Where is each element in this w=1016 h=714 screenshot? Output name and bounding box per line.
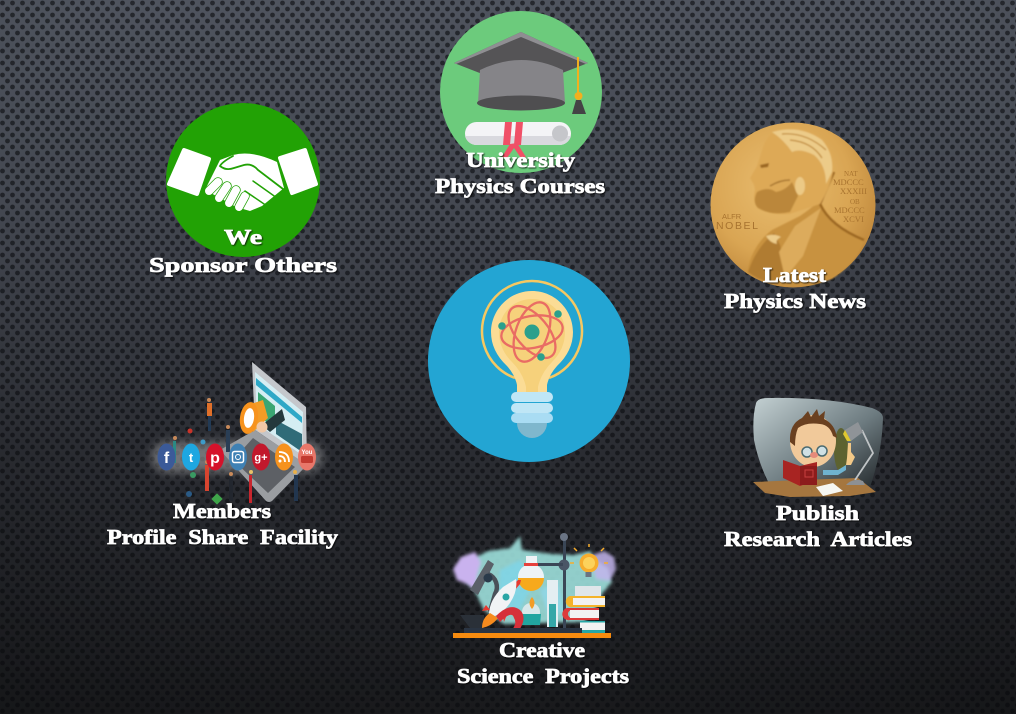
icon: cartoon professor reading: [753, 398, 883, 497]
icon: Nobel medal: XCVI: [843, 214, 864, 224]
megaphone: [238, 400, 285, 435]
heading: We Sponsor Others: We: [224, 225, 262, 249]
flask and stand: [518, 533, 570, 628]
right cuff: [280, 150, 316, 193]
icon: laptop and social media: [152, 362, 322, 505]
heading: Latest Physics News: Latest: [763, 263, 826, 287]
professor: [783, 409, 855, 496]
panel: creative science projects: [453, 533, 629, 688]
icon: Nobel medal: NOBEL: [716, 220, 758, 232]
heading: Publish Research Articles: [724, 501, 912, 551]
laptop: [220, 362, 307, 502]
microscope: [460, 560, 497, 628]
rocket: [482, 579, 521, 628]
panel: publish research articles: [724, 398, 912, 551]
icon: Nobel medal: ALFR: [722, 212, 742, 221]
icon: Nobel medal: [710, 122, 876, 288]
social media badges: g+: [254, 452, 268, 464]
people: [173, 398, 298, 505]
heading: Latest Physics News: Physics News: [724, 289, 866, 313]
icon: Nobel medal: MDCCC: [833, 177, 864, 187]
left cuff: [169, 150, 209, 194]
heading: Members Profile Share Facility: [107, 499, 339, 549]
social media badges: t: [189, 450, 194, 465]
heading: We Sponsor Others: [149, 225, 337, 277]
social media badges: You: [302, 450, 313, 456]
desk: [753, 478, 876, 497]
heading: Publish Research Articles: Publish: [776, 501, 859, 525]
clasped hands: [205, 154, 284, 211]
magnet: [496, 607, 524, 632]
icon: Nobel medal: XXXIII: [840, 186, 867, 196]
panel: university physics courses: [435, 11, 605, 198]
icon: graduation cap and diploma: [440, 11, 602, 173]
heading: Members Profile Share Facility: Members: [173, 499, 271, 523]
icon: Nobel medal: OB: [850, 198, 860, 206]
heading: Members Profile Share Facility: Profile Share Facility: [107, 525, 339, 549]
heading: Creative Science Projects: Science Projects: [457, 664, 629, 688]
icon: science lab illustration: [453, 533, 616, 638]
panel: we sponsor others: [149, 103, 337, 277]
heading: University Physics Courses: [435, 148, 605, 198]
icon: Nobel medal: NAT: [844, 170, 858, 178]
heading: University Physics Courses: University: [466, 148, 576, 172]
portrait of Alfred Nobel: [747, 128, 864, 286]
heading: Latest Physics News: [724, 263, 866, 313]
heading: University Physics Courses: Physics Courses: [435, 174, 605, 198]
social media badges: p: [210, 450, 220, 467]
icon: light bulb with atom: [482, 281, 582, 438]
heading: Publish Research Articles: Research Articles: [724, 527, 912, 551]
panel: latest physics news: [710, 122, 876, 313]
lamp: [843, 422, 873, 485]
icon: Nobel medal: MDCCC: [834, 205, 865, 215]
social media badges: [158, 444, 316, 470]
paint splash: [453, 536, 616, 624]
icon: handshake: [166, 103, 320, 257]
heading: Creative Science Projects: Creative: [499, 638, 585, 662]
heading: We Sponsor Others: Sponsor Others: [149, 253, 337, 277]
heading: Creative Science Projects: [457, 638, 629, 688]
panel: members profile share facility: [107, 362, 339, 549]
panel: central atom light bulb: [428, 260, 630, 462]
social media badges: f: [164, 450, 170, 467]
light bulb: [570, 544, 608, 577]
stack of books: [562, 586, 605, 633]
